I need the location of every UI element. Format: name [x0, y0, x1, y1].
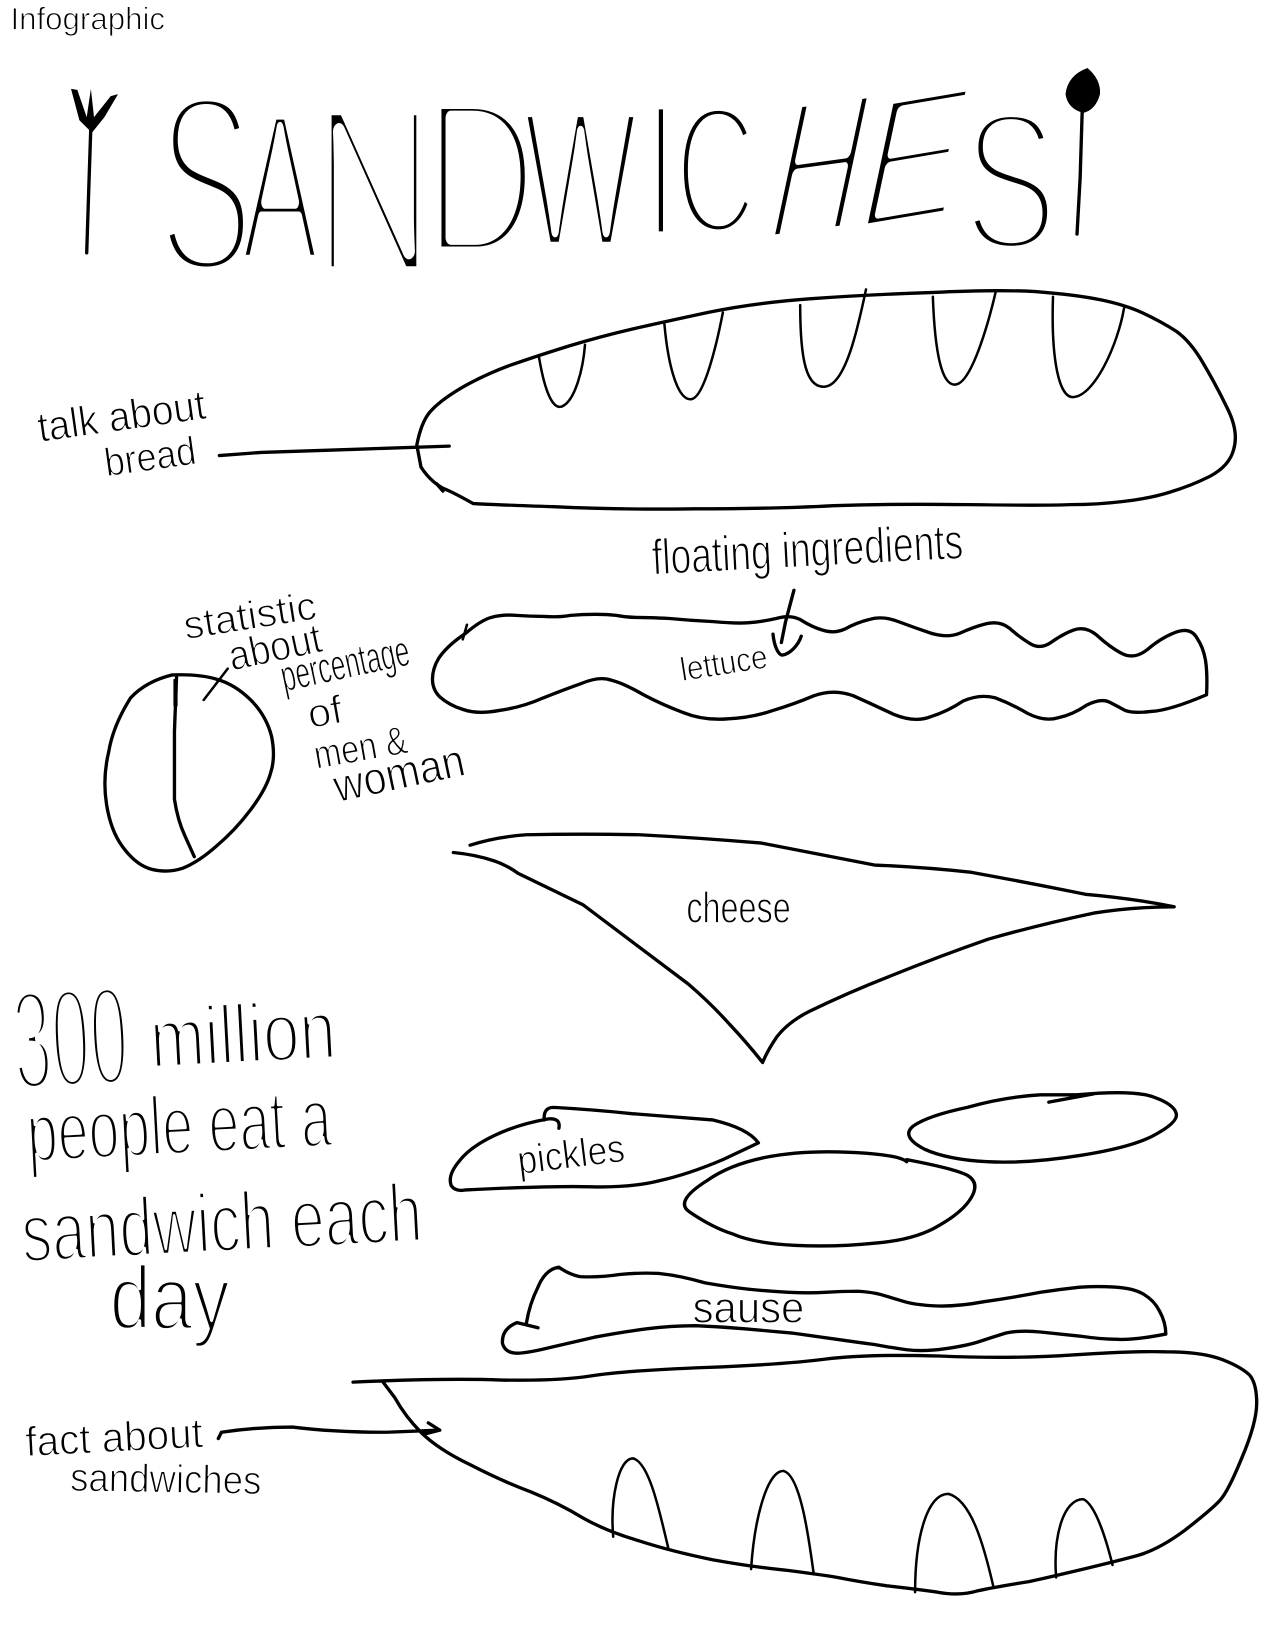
- callout: statistic about percentage of men and women: percentage: [276, 626, 414, 701]
- title: W: [522, 69, 639, 291]
- callout: statistic about percentage of men and women: statistic: [180, 584, 319, 648]
- callout: statistic about percentage of men and women: about: [224, 614, 326, 680]
- big stat: 300 million people eat a sandwich each day: people eat a: [24, 1070, 334, 1180]
- sauce layer: [502, 1267, 1166, 1353]
- title: S: [963, 70, 1058, 292]
- title: [158, 41, 1058, 327]
- label: lettuce: lettuce: [678, 639, 770, 689]
- title: S: [158, 41, 254, 326]
- callout: fact about sandwiches: sandwiches: [70, 1456, 262, 1503]
- bread score marks: [539, 289, 1124, 407]
- label: floating ingredients: floating ingredients: [651, 513, 964, 586]
- label: Infographic: Infographic: [10, 1, 165, 36]
- title: C: [675, 68, 756, 273]
- title: D: [423, 54, 538, 301]
- callout: fact about sandwiches: [24, 1409, 440, 1503]
- big stat: 300 million people eat a sandwich each day: sandwich each: [19, 1165, 425, 1280]
- pie chart: men and women: [105, 669, 273, 871]
- callout: fact about sandwiches: fact about: [24, 1409, 204, 1465]
- pickle slice: labelled: [450, 1107, 758, 1190]
- lettuce layer: [432, 614, 1207, 719]
- callout: statistic about percentage of men and women: of: [304, 688, 347, 737]
- big stat: 300 million people eat a sandwich each day: [9, 956, 425, 1349]
- arrow: to lettuce: [773, 590, 801, 655]
- label: cheese: cheese: [686, 883, 791, 932]
- pickle slice: centre: [684, 1152, 975, 1246]
- callout: talk about bread: [34, 381, 449, 485]
- title: H: [750, 46, 892, 286]
- callout: statistic about percentage of men and women: [180, 584, 469, 812]
- callout: statistic about percentage of men and women: men &: [310, 718, 411, 778]
- cheese layer: [453, 834, 1174, 1062]
- icon: fork: [71, 89, 118, 253]
- callout: talk about bread: talk about: [34, 381, 209, 451]
- bread score marks: [613, 1458, 1113, 1592]
- label: sause: sause: [693, 1284, 804, 1333]
- icon: spoon: [1066, 68, 1100, 234]
- top bread: [417, 289, 1235, 509]
- big stat: 300 million people eat a sandwich each day: million: [147, 982, 338, 1086]
- label: pickles: pickles: [515, 1126, 627, 1183]
- big stat: 300 million people eat a sandwich each day: 300: [9, 956, 132, 1120]
- callout: talk about bread: bread: [102, 429, 199, 485]
- title: A: [240, 67, 320, 307]
- title: I: [643, 61, 678, 279]
- title: E: [841, 43, 990, 273]
- big stat: 300 million people eat a sandwich each day: day: [110, 1249, 230, 1349]
- pickle slice: right: [909, 1093, 1176, 1162]
- title: N: [311, 53, 437, 327]
- callout: statistic about percentage of men and women: woman: [328, 734, 469, 812]
- bottom bread: [353, 1352, 1257, 1594]
